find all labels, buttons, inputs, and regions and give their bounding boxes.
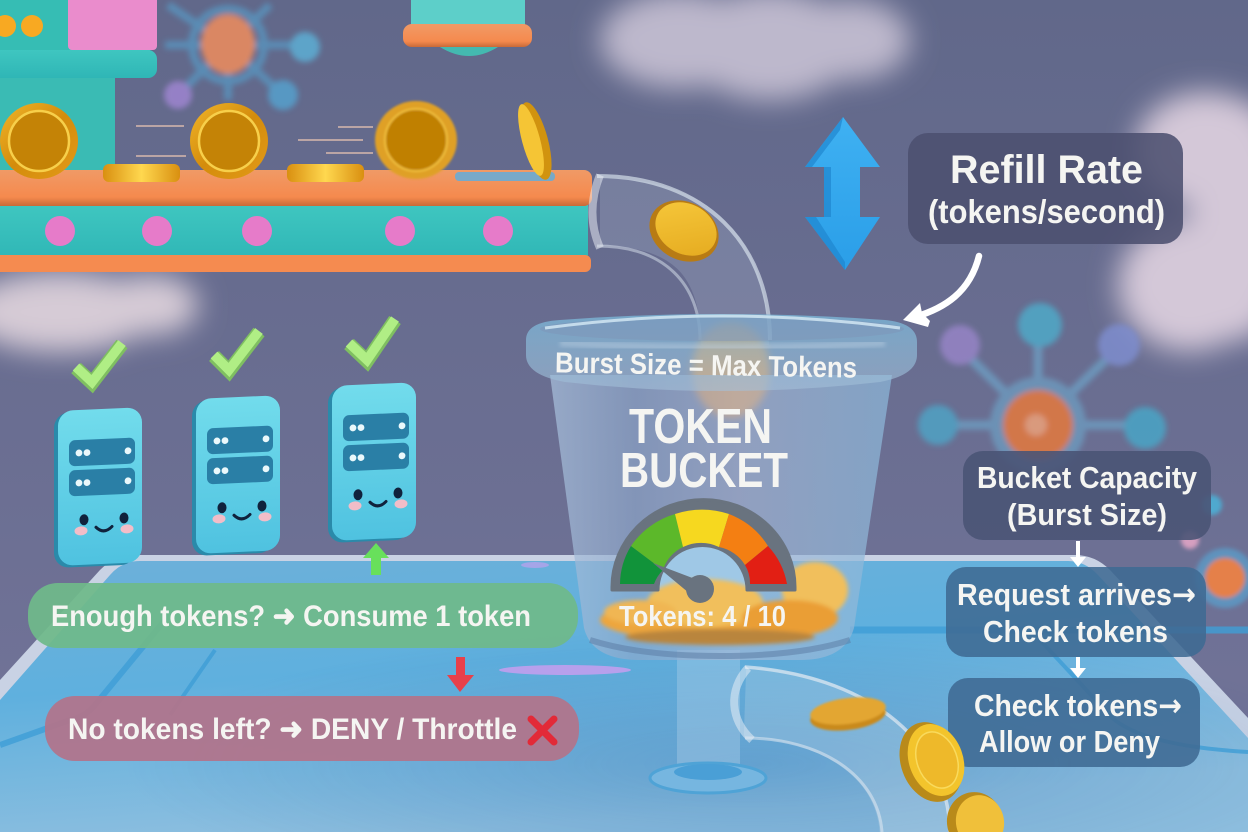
network: small right	[1181, 495, 1248, 608]
pill: deny	[45, 696, 579, 761]
arrow: green up	[363, 543, 389, 575]
servers	[54, 382, 416, 568]
coin: outflow lower	[941, 787, 1009, 832]
bucket	[526, 314, 917, 660]
bucket title: TOKEN	[629, 400, 772, 454]
coins in bucket	[600, 562, 848, 645]
box: check tokens: Allow or Deny	[979, 724, 1161, 759]
box: request arrives: Check tokens	[983, 614, 1168, 649]
cloud: top centre	[600, 0, 910, 100]
network: right	[918, 303, 1166, 473]
orange coin seen through glass	[692, 322, 770, 418]
arrow: refill to bucket	[903, 256, 979, 327]
coin: outflow large	[889, 713, 974, 811]
box: bucket capacity: (Burst Size)	[1007, 497, 1167, 532]
check marks	[76, 319, 395, 383]
pipe: top inflow	[592, 175, 770, 345]
hopper top	[403, 0, 532, 56]
box: check tokens: Check tokens→	[974, 688, 1182, 724]
network: top	[164, 5, 320, 110]
machine top left	[0, 0, 157, 190]
pill: enough tokens	[28, 583, 578, 648]
box: bucket capacity: Bucket Capacity	[977, 460, 1198, 495]
server 2	[192, 395, 280, 556]
arrow: capacity to request	[1070, 541, 1086, 567]
coins on conveyor	[0, 99, 558, 183]
server 1	[54, 407, 142, 568]
conveyor dots	[45, 216, 513, 246]
cloud: left	[0, 272, 198, 352]
callout: refill rate	[908, 133, 1183, 244]
pipe: bottom outflow	[734, 667, 950, 832]
bucket rim	[526, 314, 917, 391]
bucket stem	[650, 650, 766, 793]
callout: refill rate: (tokens/second)	[928, 193, 1165, 230]
coin in top pipe	[639, 188, 729, 274]
gauge backdrop	[658, 546, 746, 590]
rim label: Burst Size = Max Tokens	[555, 347, 857, 385]
arrow: blue double	[805, 117, 880, 270]
server 3	[328, 382, 416, 543]
callout: refill rate: Refill Rate	[950, 148, 1143, 192]
icon: red cross	[531, 719, 554, 742]
pill: deny: No tokens left? ➜ DENY / Throttle	[68, 713, 517, 746]
coin: falling flat	[809, 693, 887, 735]
gauge	[612, 500, 795, 603]
box: bucket capacity	[963, 451, 1211, 540]
arrow: red down	[447, 657, 474, 692]
motion lines	[136, 126, 373, 156]
box: check tokens	[948, 678, 1200, 767]
bucket title: BUCKET	[620, 444, 788, 498]
table top	[0, 555, 1248, 832]
cloud: right	[1118, 92, 1248, 351]
conveyor belt	[0, 170, 592, 272]
bucket body	[550, 375, 892, 660]
box: request arrives	[946, 567, 1206, 657]
pill: enough tokens: Enough tokens? ➜ Consume 1 token	[51, 600, 531, 633]
bucket title	[620, 400, 788, 498]
box: request arrives: Request arrives→	[957, 577, 1196, 613]
tokens count: Tokens: 4 / 10	[619, 601, 786, 633]
arrow: request to check	[1070, 657, 1086, 678]
